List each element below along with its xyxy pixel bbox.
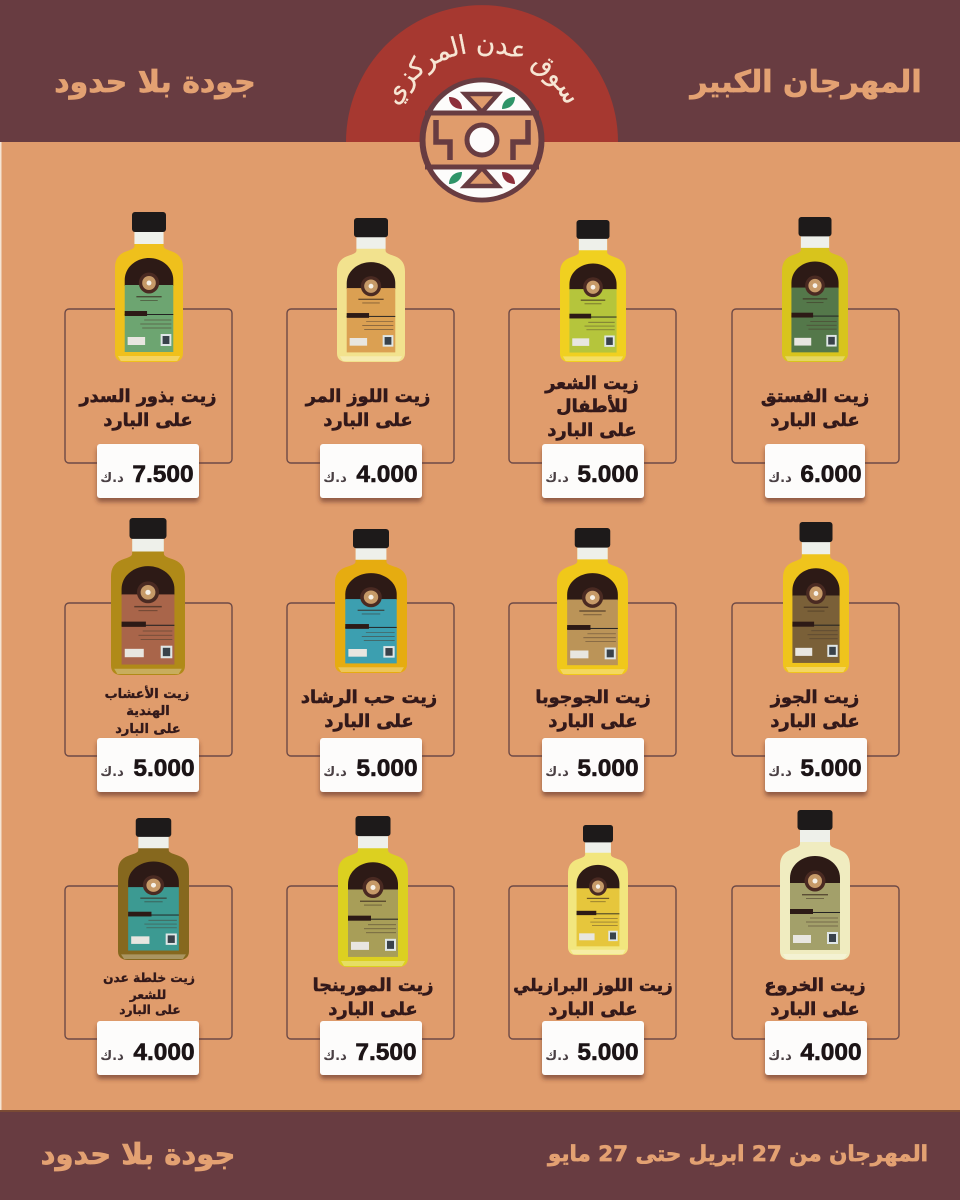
panel frames row 3 [65, 886, 899, 1039]
name: kids hair oil: للأطفال [556, 395, 628, 417]
footer top edge [0, 1110, 960, 1112]
price: 5.000: د.ك [545, 765, 569, 780]
bottle: bitter almond oil [337, 218, 405, 362]
name: moringa oil: على البارد [328, 1000, 418, 1020]
name: walnut oil [770, 688, 860, 732]
name: moringa oil [313, 976, 433, 1020]
name: jojoba oil: زيت الجوجوبا [535, 688, 651, 708]
price: 4.000 [320, 444, 422, 498]
price: 5.000: 5.000 [800, 755, 862, 782]
name: castor oil: زيت الخروع [764, 976, 866, 996]
bottle: aden hair blend oil [118, 818, 189, 960]
price: 5.000: 5.000 [577, 1039, 639, 1066]
price: 5.000 [542, 738, 644, 792]
bottle: walnut oil [783, 522, 849, 673]
name: brazilian almond oil: على البارد [548, 1000, 638, 1020]
price: 4.000: د.ك [323, 471, 347, 486]
name: sidr seed oil: زيت بذور السدر [78, 387, 217, 407]
footer slogan: جودة بلا حدود [41, 1137, 235, 1171]
name: bitter almond oil [305, 387, 430, 431]
price: 7.500: 7.500 [132, 461, 194, 488]
price: 7.500: 7.500 [355, 1039, 417, 1066]
bottle: moringa oil [338, 816, 408, 967]
name: kids hair oil: على البارد [547, 421, 637, 441]
name: kids hair oil: زيت الشعر [544, 374, 639, 394]
price: 5.000 [97, 738, 199, 792]
header red semicircle [346, 5, 618, 142]
price: 5.000 [320, 738, 422, 792]
name: aden hair blend oil: على البارد [119, 1003, 181, 1017]
price: 5.000 [765, 738, 867, 792]
bottle: pistachio oil [782, 217, 848, 362]
price: 7.500: د.ك [323, 1049, 347, 1064]
name: bitter almond oil: على البارد [323, 411, 413, 431]
bottle: indian herbs oil [111, 518, 185, 675]
price: 5.000 [542, 444, 644, 498]
price: 6.000 [765, 444, 865, 498]
price: 4.000: د.ك [768, 1049, 792, 1064]
name: sidr seed oil [78, 387, 217, 431]
price: 4.000: 4.000 [800, 1039, 862, 1066]
name: jojoba oil: على البارد [548, 712, 638, 732]
name: garden cress oil [301, 688, 437, 732]
price: 5.000: 5.000 [577, 461, 639, 488]
price: 5.000: د.ك [545, 471, 569, 486]
name: jojoba oil [535, 688, 651, 732]
name: aden hair blend oil: للشعر [129, 988, 166, 1002]
name: sidr seed oil: على البارد [103, 411, 193, 431]
price: 4.000: 4.000 [133, 1039, 195, 1066]
name: pistachio oil: على البارد [770, 411, 860, 431]
curved brand name: سوق عدن المركزي [394, 34, 574, 105]
price: 7.500 [320, 1021, 422, 1075]
name: brazilian almond oil: زيت اللوز البرازيلي [513, 975, 673, 996]
name: indian herbs oil: على البارد [115, 722, 181, 737]
header title right: المهرجان الكبير [688, 65, 922, 100]
bottle: jojoba oil [557, 528, 628, 675]
name: garden cress oil: على البارد [324, 712, 414, 732]
name: kids hair oil [544, 374, 639, 441]
price: 5.000: د.ك [545, 1049, 569, 1064]
logo [422, 80, 542, 200]
name: moringa oil: زيت المورينجا [313, 976, 433, 996]
name: castor oil: على البارد [770, 1000, 860, 1020]
name: garden cress oil: زيت حب الرشاد [301, 688, 437, 708]
price: 6.000: د.ك [768, 471, 792, 486]
footer band [0, 1110, 960, 1200]
name: aden hair blend oil [103, 971, 195, 1017]
header slogan left: جودة بلا حدود [54, 65, 256, 100]
left edge strip [0, 142, 2, 1110]
bottle: sidr seed oil [115, 212, 183, 362]
name: bitter almond oil: زيت اللوز المر [305, 387, 430, 407]
name: pistachio oil [761, 387, 869, 431]
bottle: castor oil [780, 810, 850, 960]
price: 4.000: 4.000 [356, 461, 418, 488]
bottle: brazilian almond oil [568, 825, 628, 955]
price: 4.000 [97, 1021, 199, 1075]
price: 7.500: د.ك [100, 471, 124, 486]
price: 5.000: 5.000 [577, 755, 639, 782]
price: 4.000 [765, 1021, 867, 1075]
name: brazilian almond oil [513, 975, 673, 1020]
name: indian herbs oil: الهندية [126, 704, 170, 719]
bottle: garden cress oil [335, 529, 407, 673]
bottle: kids hair oil [560, 220, 626, 362]
panel frames row 2 [65, 603, 899, 756]
price: 5.000: د.ك [100, 765, 124, 780]
price: 5.000: 5.000 [356, 755, 418, 782]
name: aden hair blend oil: زيت خلطة عدن [103, 971, 195, 985]
price: 5.000 [542, 1021, 644, 1075]
price: 6.000: 6.000 [800, 461, 862, 488]
header band [0, 0, 960, 142]
name: indian herbs oil: زيت الأعشاب [105, 685, 189, 702]
price: 5.000: د.ك [323, 765, 347, 780]
name: castor oil [764, 976, 866, 1020]
price: 5.000: 5.000 [133, 755, 195, 782]
price: 4.000: د.ك [100, 1049, 124, 1064]
name: indian herbs oil [105, 685, 189, 737]
name: walnut oil: زيت الجوز [770, 688, 859, 708]
footer dates: المهرجان من 27 ابريل حتى 27 مايو [547, 1142, 928, 1167]
name: pistachio oil: زيت الفستق [761, 387, 869, 407]
price: 7.500 [97, 444, 199, 498]
panel frames row 1 [65, 309, 899, 463]
name: walnut oil: على البارد [770, 712, 860, 732]
price: 5.000: د.ك [768, 765, 792, 780]
